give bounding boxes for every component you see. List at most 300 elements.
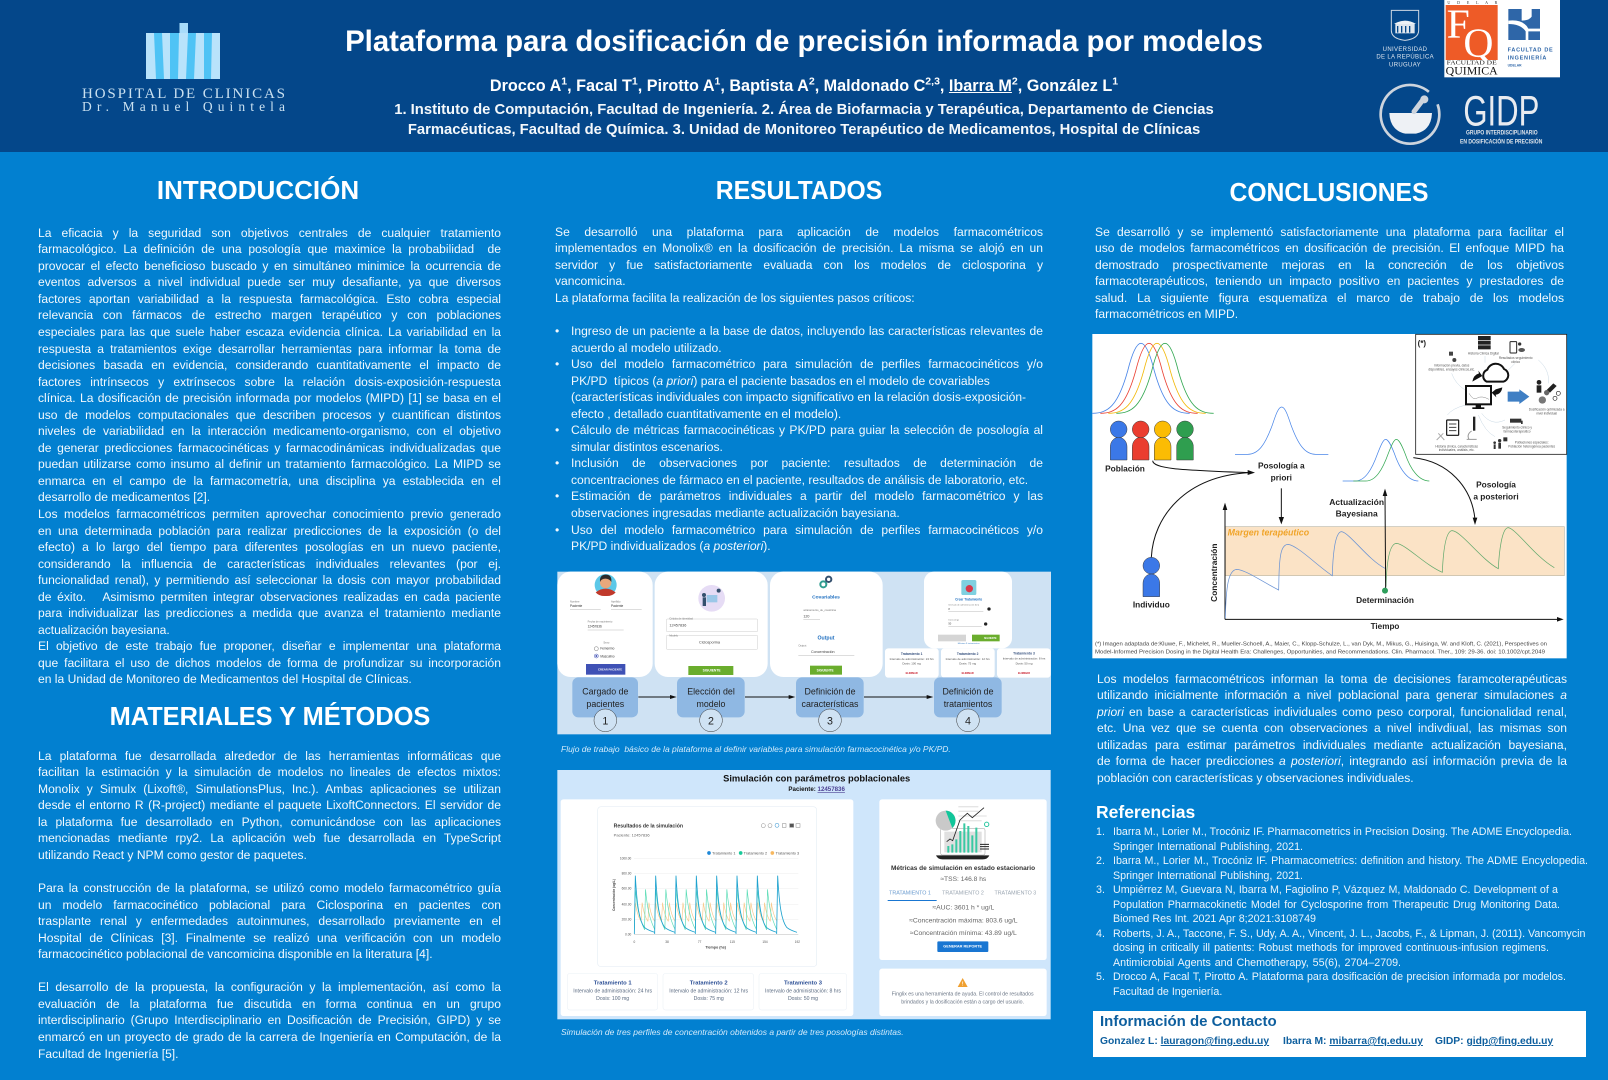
list: referencias: Drocco A, Facal T, Pirotto A. Plataforma para dosificación de precision informada por modelos.	[1113, 971, 1566, 983]
text block: materiales y métodos: un modelo farmacocinético poblacional para Ciclosporina en pacientes con	[38, 898, 501, 912]
panel: advertencia: Finglix es una herramienta de ayuda. El control de resultados	[892, 992, 1034, 998]
inset labels: Poblaciones especiales:	[1515, 441, 1549, 445]
treatment mini cards: Dosis: 100 mg	[902, 662, 921, 666]
text block: materiales y métodos: enmarcó en un proyecto de grado de la carrera de Ingeniería en Computación, de la	[38, 1030, 501, 1044]
axis label: tiempo: Tiempo	[1371, 622, 1399, 631]
text block: conclusiones: farmacoterapéuticos, teniendo un impacto positivo en pacientes y prestadores de	[1095, 274, 1564, 288]
chart series: tratamiento 3	[634, 903, 777, 921]
text block: explicación del marco	[1096, 672, 1567, 785]
text block: introducción: El objetivo de este trabajo fue proponer, diseñar e implementar una plataforma	[38, 639, 501, 653]
step 3	[796, 677, 864, 732]
card: definición de tratamientos: Dosis (mg)	[948, 619, 959, 621]
icon: clipboard	[1447, 420, 1459, 435]
card: definición de tratamientos: SIGUIENTE	[984, 638, 997, 640]
axes	[1223, 503, 1564, 622]
icon: phone	[1510, 342, 1525, 353]
step 1	[572, 677, 638, 732]
text block: explicación del marco: priori en base a características individuales como peso corporal, funcionalidad renal,	[1097, 705, 1567, 719]
legend	[707, 851, 799, 855]
panel: métricas: Métricas de simulación en estado estacionario	[891, 865, 1035, 872]
treatment cards: Dosis: 75 mg	[694, 996, 724, 1002]
list: pasos críticos: acuerdo al modelo utilizado.	[571, 341, 722, 355]
step 4: tratamientos	[944, 699, 993, 709]
text block: materiales y métodos: La plataforma fue desarrollada alrededor de las herramientas informáticas que	[38, 749, 501, 763]
step 1: pacientes	[586, 699, 625, 709]
chart axis labels: 0	[633, 940, 635, 944]
text block: introducción: clínica. La dosificación de precisión informada por modelos (MIPD) [1] se basa en el	[38, 391, 501, 405]
text block: materiales y métodos: desde el entorno R (R-project) mediante el paquete LixoftConnectors. El servidor de	[38, 798, 501, 812]
card: elección del modelo	[655, 572, 768, 677]
chart axis labels: 77	[698, 940, 702, 944]
list: pasos críticos: observaciones ingresadas mediante actualización bayesiana.	[571, 506, 900, 520]
text block: resultados intro: servidor y fue satisfactoriamente evaluada con los modelos de ciclosporina y	[555, 258, 1043, 272]
logo: Hospital de Clínicas: Dr. Manuel Quintela	[82, 99, 285, 114]
step 2: modelo	[697, 699, 726, 709]
figure: marco de trabajo MIPD	[1092, 334, 1568, 658]
panel: advertencia: !	[962, 982, 964, 988]
list: referencias: dosing in critically ill patients: Robust methods for improved continuous-infusion regimens.	[1113, 942, 1549, 954]
logo: GIDP: EN DOSIFICACIÓN DE PRECISIÓN	[1460, 136, 1543, 145]
heading: Resultados: RESULTADOS	[716, 175, 882, 205]
text block: introducción: para individualizar las predicciones a medida que avanza el tratamiento mediante	[38, 606, 501, 620]
text block: introducción: desarrollo de medicamentos [2].	[38, 490, 210, 504]
logo: Facultad de Química and Facultad de Ingeniería: UDELAR	[1508, 63, 1522, 67]
text block: materiales y métodos	[38, 749, 501, 1061]
card: definición de características: 120	[803, 614, 809, 618]
inset labels: Seguimiento clínico y	[1502, 426, 1532, 430]
text block: introducción: que facilitara el uso de dichos modelos de forma de profundizar su incorporación	[38, 656, 501, 670]
card: definición de características: Covariables	[812, 594, 840, 600]
text block: explicación del marco: utilizando inicialmente información a nivel poblacional para generar simulaciones a	[1097, 688, 1567, 702]
text block: introducción: factores aportan variabilidad a la respuesta farmacológica. Esto cobra especial	[38, 292, 501, 306]
footnote	[1095, 642, 1547, 656]
card: cargado de pacientes: CREAR PACIENTE	[598, 667, 622, 671]
card: definición de características: Concentración	[811, 650, 835, 654]
inset labels: Información previa, datos	[1434, 363, 1470, 367]
figure: flujo de trabajo	[557, 572, 1051, 734]
chart axis labels: 400.00	[622, 902, 632, 906]
heading: Referencias: Referencias	[1096, 802, 1195, 822]
text block: introducción: de generar predicciones farmacocinéticas y farmacodinámicas individualizadas que	[38, 441, 501, 455]
list: referencias: 2.	[1096, 855, 1105, 867]
list: pasos críticos: PK/PD típicos (a priori) para el paciente basados en el modelo de covariables	[571, 374, 990, 388]
treatment mini cards: Tratamiento 1	[901, 652, 923, 656]
inset labels: nivel individual	[1536, 411, 1557, 415]
card: definición de tratamientos	[924, 572, 1012, 648]
panel: métricas: TRATAMIENTO 1	[889, 890, 931, 896]
heading: Introducción: INTRODUCCIÓN	[157, 175, 359, 205]
list: pasos críticos: simular distintos escenarios.	[571, 440, 723, 454]
text block: conclusiones: demostrado prospectivamente mejoras en la concreción de los objetivos	[1095, 258, 1564, 272]
arrow: actualización bayesiana	[1383, 489, 1387, 590]
treatment mini cards: ELIMINAR	[1018, 672, 1030, 675]
icon: server	[1478, 336, 1491, 349]
a priori distribution	[1235, 407, 1328, 454]
card: definición de tratamientos: 8	[948, 607, 950, 611]
step 3: Definición de	[804, 687, 856, 697]
logo: Facultad de Química and Facultad de Ingeniería: Q	[1463, 21, 1493, 67]
list: referencias: Springer International Publishing, 2021.	[1113, 840, 1303, 852]
panel: advertencia: brindados y la dosificación están a cargo del usuario.	[901, 999, 1024, 1005]
text block: introducción: factores intrínsecos y extrínsecos sobre la relación dosis-exposición-respuesta	[38, 375, 501, 389]
inset labels: Historia Clínica Digital	[1468, 352, 1499, 356]
list: referencias: Ibarra M., Lorier M., Trocóniz IF. Pharmacometrics: definition and history. The ADME Encyclopedia.	[1113, 855, 1588, 867]
step 1: Cargado de	[582, 687, 628, 697]
text block: introducción: en una determinada población para realizar predicciones de la exposición (o del	[38, 524, 501, 538]
axis label: concentración: Concentración	[1209, 544, 1219, 602]
card: cargado de pacientes: Paciente	[570, 604, 583, 608]
label: actualización bayesiana: Actualización	[1329, 497, 1384, 507]
text block: materiales y métodos: Para la construcción de la plataforma, se utilizó como modelo farmacométrico guía	[38, 881, 501, 895]
logo: GIDP	[1381, 85, 1543, 145]
label: posología a priori: Posología a	[1258, 461, 1305, 471]
logo: Facultad de Química and Facultad de Ingeniería: FACULTAD DE	[1447, 60, 1497, 66]
list: referencias: Biomed Res Int. 2021 Apr 8;2021:3108749	[1113, 913, 1316, 925]
treatment mini cards: Intervalo de administración: 12 hrs	[946, 657, 990, 661]
text block: introducción: efecto) a lo largo del tiempo para diferentes posologías en un nuevo paciente,	[38, 540, 501, 554]
chart axis labels: 192	[795, 940, 800, 944]
card: elección del modelo: Modelo	[669, 634, 679, 638]
text block: introducción: especiales para las que suele haber escaza evidencia clínica. La variabilidad en la	[38, 325, 501, 339]
chart axis labels: 1000.00	[620, 856, 632, 860]
text: •	[555, 523, 559, 537]
list: pasos críticos: Cálculo de métricas farmacocinéticas y PK/PD para guiar la selección de posología al	[571, 423, 1043, 437]
treatment mini cards	[885, 648, 1051, 678]
card: definición de características	[770, 572, 883, 677]
text block: introducción: respuesta a tratamientos exige desarrollar herramientas para informar la toma de	[38, 342, 501, 356]
label: población: Población	[1105, 463, 1145, 473]
card: definición de tratamientos: 50	[948, 622, 952, 626]
footnote: Model-Informed Precision Dosing in the Digital Health Era: Challenges, Opportunities, and Recommendations. Clin. Pharmacol. Ther., 109: 29-36. doi: 10.1002/cpt.2049	[1095, 650, 1545, 656]
header banner	[0, 0, 1608, 152]
text block: materiales y métodos: Hospital de Clínicas [3]. Finalmente se realizó una verificación con un modelo	[38, 931, 501, 945]
card: elección del modelo: Cédula de identidad	[669, 616, 693, 620]
logo: Facultad de Química and Facultad de Ingeniería: U D E L A R	[1447, 0, 1498, 5]
arrows to posología a priori	[1151, 461, 1248, 557]
text: •	[555, 423, 559, 437]
list: referencias: Antimicrobial Agents and Chemotherapy, 55(6), 2704–2709.	[1113, 956, 1401, 968]
logo: Universidad de la República: URUGUAY	[1389, 63, 1421, 69]
card: definición de tratamientos: Crear Tratamiento	[955, 598, 982, 602]
panel: métricas: ≈Concentración máxima: 803.6 ug/L	[909, 917, 1018, 924]
icon: populations	[1493, 437, 1507, 449]
card: cargado de pacientes: Masculino	[600, 654, 615, 658]
list: referencias: 3.	[1096, 884, 1105, 896]
list: referencias: Population Pharmacokinetic Model for Cyclosporine from Therapeutic Drug Monitoring Data.	[1113, 898, 1560, 910]
text block: materiales y métodos: trasplante renal y enfermedades autoinmunes, desarrollado previamente en el	[38, 914, 501, 928]
icon: cloud	[1483, 364, 1508, 382]
contact details: Gonzalez L: lauragon@fing.edu.uy	[1100, 1036, 1269, 1047]
card: definición de tratamientos: Máximo 3 tratamientos	[958, 642, 980, 645]
concentration curve: a posteriori	[1386, 528, 1554, 587]
card: cargado de pacientes: Sexo	[603, 640, 610, 644]
text block: resultados intro: La plataforma facilita la realización de los siguientes pasos críticos:	[555, 291, 915, 305]
card: definición de tratamientos: Intervalo de administración (hrs)	[948, 603, 979, 606]
logo: Hospital de Clínicas	[82, 23, 285, 114]
panel: información de contacto	[1093, 1011, 1586, 1057]
inset labels: individuales, análisis, etc.	[1439, 448, 1475, 452]
patient id: Paciente: 12457836	[788, 786, 845, 793]
treatment mini cards: Dosis: 50 mg	[1016, 661, 1033, 665]
affiliations: 1. Instituto de Computación, Facultad de Ingeniería. 2. Área de Biofarmacia y Terapéutica, Departamento de Ciencias	[394, 102, 1214, 118]
card: definición de características: aclaramiento_de_creatinina	[803, 608, 836, 612]
inset labels: disponibles, ensayos clínicos,etc.	[1428, 367, 1475, 371]
card: cargado de pacientes: Fecha de nacimiento	[588, 620, 613, 624]
list: pasos críticos: PK/PD individualizados (a posteriori).	[571, 539, 771, 553]
card: cargado de pacientes: Apellido	[611, 599, 621, 603]
logo: Facultad de Química and Facultad de Ingeniería: FACULTAD DE	[1508, 47, 1553, 53]
text block: introducción: enmarca en el campo de la farmacometría, una disciplina ya establecida en el	[38, 474, 501, 488]
text block: conclusiones: salud. La siguiente figura esquematiza el marco de trabajo de los modelos	[1095, 291, 1564, 305]
list: referencias: Facultad de Ingeniería.	[1113, 986, 1222, 998]
text block: explicación del marco: Los modelos farmacométricos informan la toma de decisiones faramcoterapéuticas	[1097, 672, 1567, 686]
affiliations	[394, 100, 1214, 138]
inset: digital health framework	[1416, 334, 1567, 454]
treatment cards: Tratamiento 1	[594, 980, 632, 986]
inset labels: Historia clínica, características	[1435, 444, 1478, 448]
label: posología a posteriori	[1473, 480, 1519, 502]
treatment cards: Intervalo de administración: 24 hrs	[573, 988, 652, 994]
chart series: tratamiento 1	[634, 876, 797, 934]
population distributions	[1092, 343, 1214, 413]
treatment mini cards: ELIMINAR	[906, 672, 918, 675]
text block: resultados intro	[555, 225, 1043, 305]
text block: introducción	[38, 226, 501, 686]
text block: introducción: decisiones basada en evidencia, considerando cuantitativamente el impacto de	[38, 358, 501, 372]
text block: introducción: actualización bayesiana.	[38, 623, 170, 637]
label: actualización bayesiana: Bayesiana	[1336, 509, 1378, 519]
treatment cards: Dosis: 100 mg	[596, 996, 629, 1002]
step 2: 2	[708, 715, 714, 727]
card: elección del modelo: 12457836	[669, 623, 686, 627]
list: referencias: 4.	[1096, 928, 1105, 940]
logo: Hospital de Clínicas: HOSPITAL DE CLINICAS	[82, 86, 285, 102]
icon: DNA	[1437, 433, 1444, 440]
arrows between steps	[638, 695, 933, 699]
text block: explicación del marco: utilizadas para estimar parámetros individuales mediante actualización bayesiana,	[1097, 738, 1567, 752]
text: •	[555, 456, 559, 470]
concentration curve: a priori	[1225, 532, 1385, 618]
card: definición de características: Output	[798, 644, 807, 648]
treatment mini cards: Intervalo de administración: 24 hrs	[890, 657, 934, 661]
label: determinación: Determinación	[1356, 595, 1414, 605]
contact details: Ibarra M: mibarra@fq.edu.uy	[1283, 1036, 1423, 1047]
list: pasos críticos: Uso del modelo farmacométrico para simulación de perfiles farmacocinéticos y/o	[571, 523, 1043, 537]
determinación point	[1382, 588, 1388, 594]
card: elección del modelo: Ciclosporina	[699, 641, 721, 645]
list: pasos críticos: Estimación de parámetros individuales a partir del modelo farmacométrico y las	[571, 489, 1043, 503]
text block: explicación del marco: de forma de hacer predicciones a posteriori, integrando así información previa de la	[1097, 754, 1567, 768]
panel: métricas: ≈TSS: 146.8 hs	[940, 876, 987, 883]
treatment cards: Intervalo de administración: 12 hrs	[669, 988, 748, 994]
text block: materiales y métodos: Monolix y Simulx (Lixoft®, SimulationsPlus, Inc.). Ambas aplicaciones se utilizan	[38, 782, 501, 796]
inset labels	[1428, 352, 1565, 452]
icon: blue arrow	[1508, 389, 1529, 404]
text block: introducción: considerando la influencia de características individuales relevantes (por ej.	[38, 557, 501, 571]
therapeutic margin band: Margen terapéutico	[1228, 527, 1310, 537]
text block: materiales y métodos: utilizando React y NPM como gestor de paquetes.	[38, 848, 307, 862]
icon: lab	[1449, 352, 1456, 362]
treatment cards	[567, 973, 847, 1010]
step 1: 1	[602, 715, 608, 727]
logo: Facultad de Química and Facultad de Ingeniería: QUIMICA	[1446, 66, 1499, 78]
logos group	[1376, 0, 1560, 145]
text block: introducción: de éxito. Asimismo permiten integrar observaciones realizadas en cada paciente	[38, 590, 501, 604]
contact title: Información de Contacto	[1100, 1013, 1277, 1030]
text block: explicación del marco: etc. Una vez que se cuenta con observaciones a nivel indivdiual, las mismas son	[1097, 721, 1567, 735]
affiliations: Farmacéuticas, Facultad de Química. 3. Unidad de Monitoreo Terapéutico de Medicamentos, Hospital de Clínicas	[408, 122, 1200, 138]
text block: materiales y métodos: facilitan la estimación y la simulación de modelos no lineales de efectos mixtos:	[38, 765, 501, 779]
chart axis labels: 200.00	[622, 917, 632, 921]
panel: chart	[561, 799, 853, 1016]
text block: materiales y métodos: farmacocinético poblacional de vancomicina disponible en la literatura [4].	[38, 947, 433, 961]
panel: métricas: TRATAMIENTO 3	[994, 890, 1036, 896]
logo: GIDP: GIDP	[1463, 87, 1539, 135]
legend: Tratamiento 2	[744, 851, 767, 855]
text block: introducción: uso de modelos computacionales que describen procesos y cuantifican distintos	[38, 408, 501, 422]
text block: introducción: puedan utilizarse como insumo al definir un tratamiento farmacológico. La MIPD se	[38, 457, 501, 471]
card: cargado de pacientes: 12457836	[588, 625, 602, 629]
a posteriori distributions	[1343, 439, 1429, 481]
panel: métricas	[879, 799, 1047, 960]
text block: conclusiones: uso de modelos farmacométricos en dosificación de precisión. El enfoque MIPD ha	[1095, 241, 1564, 255]
step 2: Elección del	[687, 687, 735, 697]
chart axis labels: 0.00	[625, 932, 632, 936]
treatment mini cards: Tratamiento 3	[1013, 652, 1035, 656]
chart axis labels	[612, 856, 800, 950]
label: posología a priori: priori	[1271, 472, 1292, 482]
icon: laptop with chart	[936, 807, 989, 859]
figure title: Simulación con parámetros poblacionales	[723, 774, 910, 784]
heading: Conclusiones: CONCLUSIONES	[1230, 177, 1428, 207]
inset labels: clínico	[1511, 360, 1520, 364]
text block: materiales y métodos: interdisciplinario (Grupo Interdisciplinario en Dosificación de Precisión, GIPD) y se	[38, 1013, 501, 1027]
step 2	[677, 677, 745, 732]
logo: Facultad de Química and Facultad de Ingeniería: INGENIERÍA	[1508, 53, 1546, 61]
caption: figura simulación: Simulación de tres perfiles de concentración obtenidos a partir de tres posologías distintas.	[561, 1027, 904, 1037]
step 3: características	[802, 699, 859, 709]
arrow: a priori to margin	[1279, 488, 1284, 524]
text block: resultados intro: vancomicina.	[555, 274, 626, 288]
step 4: 4	[965, 715, 971, 727]
text block: materiales y métodos: Facultad de Ingeniería [5].	[38, 1047, 179, 1061]
text block: materiales y métodos: mencionadas mediante rpy2. La aplicación web fue desarrollada en TypeScript	[38, 831, 501, 845]
title: Plataforma para dosificación de precisión informada por modelos	[345, 25, 1263, 58]
list: referencias: 5.	[1096, 971, 1105, 983]
list: pasos críticos: concentraciones de fármaco en el paciente, resultados de análisis de laboratorio, etc.	[571, 473, 1028, 487]
card: cargado de pacientes: Femenino	[600, 647, 615, 651]
text block: introducción: La eficacia y la seguridad son objetivos centrales de cualquier tratamiento	[38, 226, 501, 240]
heading: Materiales y métodos: MATERIALES Y MÉTODOS	[110, 701, 430, 731]
arrowhead: a priori	[1248, 470, 1255, 475]
icon: población	[1110, 421, 1193, 460]
chart axis labels: 115	[730, 940, 735, 944]
list: pasos críticos: Ingreso de un paciente a la base de datos, incluyendo las características relevantes de	[571, 324, 1043, 338]
text block: introducción: provocar el efecto beneficioso buscado y en simultáneo minimice la ocurrencia de	[38, 259, 501, 273]
step 4: Definición de	[942, 687, 994, 697]
text: •	[555, 357, 559, 371]
text block: explicación del marco: población con características y observaciones individuales.	[1097, 771, 1414, 785]
arrow: a posteriori	[1413, 458, 1477, 525]
list: pasos críticos	[555, 324, 1043, 553]
card: definición de características: SIGUIENTE	[817, 668, 834, 672]
therapeutic margin band	[1225, 527, 1564, 576]
label: posología a posteriori: Posología	[1476, 480, 1516, 490]
chart axis labels: 800.00	[622, 871, 632, 875]
panel: métricas: ≈AUC: 3601 h * ug/L	[932, 904, 995, 911]
list: referencias: Ibarra M., Lorier M., Trocóniz IF. Pharmacometrics in Precision Dosing. The ADME Encyclopedia.	[1113, 826, 1572, 838]
contact details	[1100, 1036, 1554, 1047]
label: posología a priori	[1258, 461, 1305, 482]
panel: chart: Resultados de la simulación	[614, 823, 683, 829]
list: pasos críticos: Inclusión de observaciones por paciente: resultados de determinación de	[571, 456, 1043, 470]
icon: individuo	[1143, 557, 1160, 597]
list: pasos críticos: Uso del modelo farmacométrico para simulación de perfiles farmacocinéticos y/o	[571, 357, 1043, 371]
list: pasos críticos: efecto , detallado cuantitativamente en el modelo).	[571, 407, 841, 421]
treatment cards: Intervalo de administración: 8 hrs	[765, 988, 841, 994]
label: posología a posteriori: a posteriori	[1473, 492, 1519, 502]
step 4	[934, 677, 1002, 732]
text block: introducción: relevancia con fármacos de estrecho margen terapéutico y con poblaciones	[38, 308, 501, 322]
text block: conclusiones: Se desarrolló y se implementó satisfactoriamente una plataforma para facilitar el	[1095, 225, 1564, 239]
figure: simulación con parámetros poblacionales	[557, 770, 1051, 1020]
label: actualización bayesiana	[1329, 497, 1384, 519]
logo: Universidad de la República: UNIVERSIDAD	[1383, 47, 1428, 53]
text block: materiales y métodos: evaluación de la plataforma fue discutida en forma continua en un grupo	[38, 997, 501, 1011]
inset labels: Población heterogénea pacientes	[1508, 445, 1556, 449]
label: individuo: Individuo	[1133, 599, 1170, 609]
authors: Drocco A1, Facal T1, Pirotto A1, Baptista A2, Maldonado C2,3, Ibarra M2, González L1	[490, 76, 1118, 95]
chart axis labels: 154	[762, 940, 768, 944]
inset labels: Resultados seguimiento	[1499, 356, 1533, 360]
text block: resultados intro: implementados en Monolix® en la dosificación de precisión. La misma se alojó en un	[555, 241, 1043, 255]
icon: bed	[1510, 419, 1523, 424]
step 3: 3	[827, 715, 833, 727]
legend: Tratamiento 3	[776, 851, 799, 855]
icon: optimised dose	[1537, 380, 1560, 404]
logo: Universidad de la República: DE LA REPÚBLICA	[1376, 54, 1434, 61]
chart series: tratamiento 2	[634, 889, 777, 930]
card: definición de características: Output	[818, 636, 835, 642]
logo: Facultad de Química and Facultad de Ingeniería: F	[1447, 1, 1470, 47]
panel: advertencia	[879, 969, 1047, 1016]
text block: materiales y métodos: la plataforma fue desarrollado en Python, comunicándose con las aplicaciones	[38, 815, 501, 829]
panel: métricas: TRATAMIENTO 2	[942, 890, 984, 896]
chart axis labels: Concentración (ug/L)	[612, 879, 616, 911]
logo: GIDP: GRUPO INTERDISCIPLINARIO	[1466, 129, 1538, 136]
text block: conclusiones: farmacométricos en MIPD.	[1095, 307, 1238, 321]
treatment mini cards: Intervalo de administración: 8 hrs	[1003, 657, 1046, 661]
text block: materiales y métodos: El desarrollo de la propuesta, la configuración y la implementación, así como la	[38, 980, 501, 994]
panel: métricas: ≈Concentración mínima: 43.89 ug/L	[910, 930, 1017, 937]
list: pasos críticos: (características individuales con impacto significativo en la relación dosis-exposición-	[571, 390, 1026, 404]
inset labels: Dosificación optimizada a	[1529, 407, 1565, 411]
chart axis labels: 38	[665, 940, 669, 944]
text block: introducción: eventos adversos a nivel individual puede ser muy desafiante, ya que diversos	[38, 275, 501, 289]
text block: introducción: farmacológico. La definición de una posología que maximice la probabilidad de	[38, 242, 501, 256]
text block: introducción: en la Unidad de Monitoreo de Medicamentos del Hospital de Clínicas.	[38, 672, 412, 686]
card: cargado de pacientes	[557, 572, 653, 677]
card: elección del modelo: SIGUIENTE	[703, 669, 721, 673]
treatment cards: Tratamiento 3	[784, 980, 823, 986]
list: referencias: Springer International Publishing, 2021.	[1113, 870, 1303, 882]
legend: Tratamiento 1	[712, 851, 735, 855]
footnote: (*) Imagen adaptada de:Kluwe, F., Michelet, R., Mueller-Schoell, A., Maier, C., Klopp-Schulze, L., van Dyk, M., Mikus, G., Huisinga, W. and Kloft, C. (2021), Perspectives on	[1095, 642, 1547, 648]
list: referencias: Umpiérrez M, Guevara N, Ibarra M, Fagiolino P, Vázquez M, Maldonado C. Development of a	[1113, 884, 1558, 896]
icon: monitor	[1466, 386, 1491, 409]
logo: Universidad de la República	[1376, 10, 1434, 69]
inset labels: farmacoterapéutico	[1503, 429, 1531, 433]
